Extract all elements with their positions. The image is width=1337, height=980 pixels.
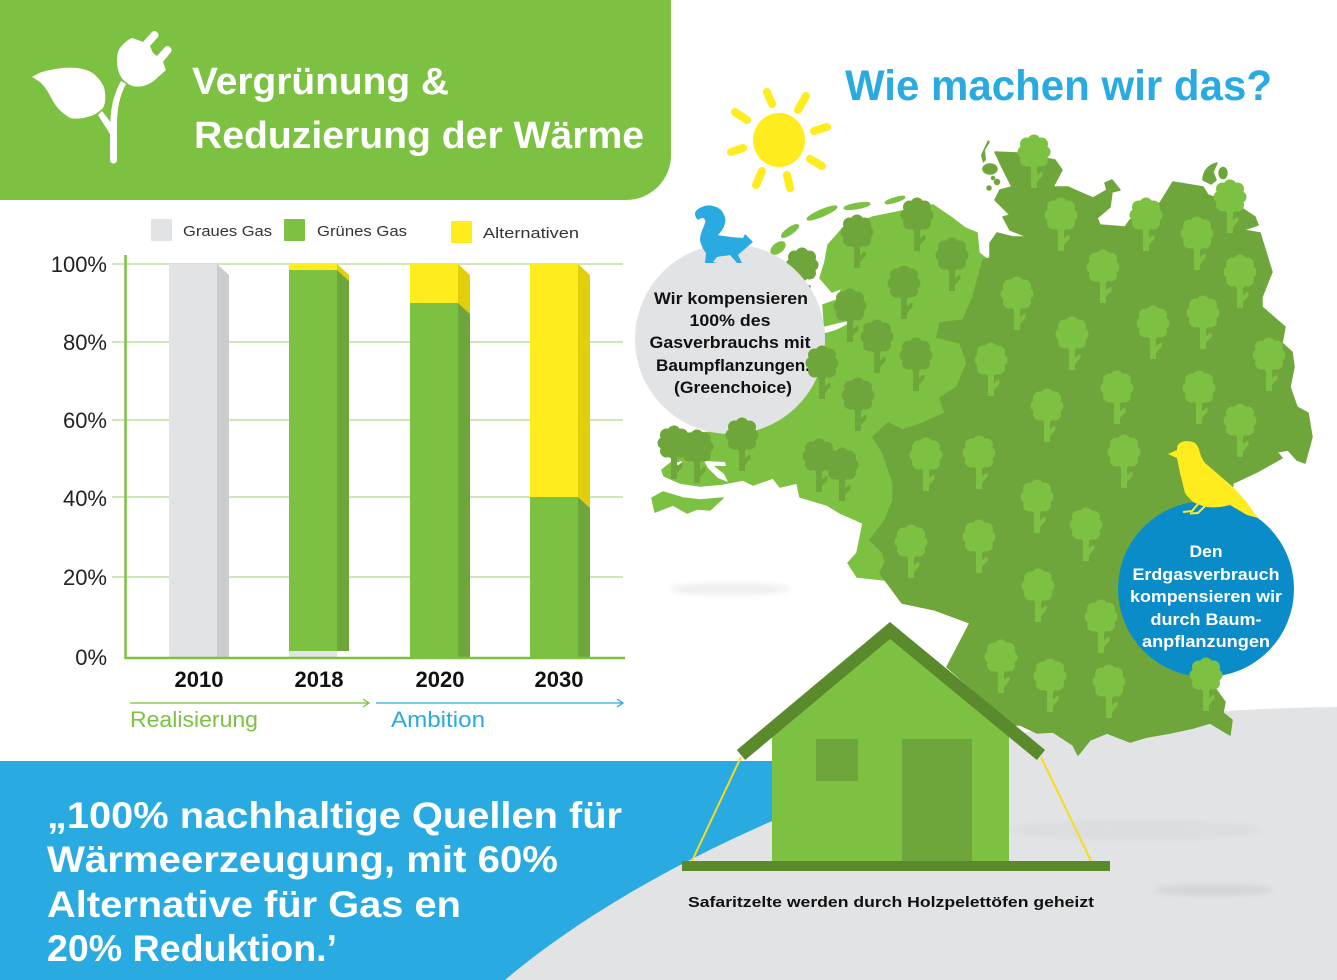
arrow: Ambition: Ambition [391,707,485,732]
caption: Safaritzelte werden durch Holzpelettöfen geheizt [688,894,1094,911]
base [682,861,1110,871]
legend [151,219,579,243]
white inlets [675,320,853,482]
bar 2030 [530,264,590,657]
callout: grey circle: 100% des [690,311,770,330]
arrow: Realisierung: Realisierung [130,707,258,732]
y axis labels: 40% [63,486,107,511]
x axis labels: 2018 [295,667,343,692]
title [192,61,644,157]
x axis labels: 2020 [416,667,464,692]
door [902,739,972,861]
callout: blue circle: Den [1190,542,1222,561]
legend: Grünes Gas [317,223,407,240]
bar 2010 [169,264,229,657]
quote: Alternative für Gas en [47,884,461,925]
callout: grey circle: Wir kompensieren [654,289,808,308]
title: Reduzierung der Wärme [194,115,644,157]
shadows [670,583,1273,896]
trees on Germany [894,134,1286,718]
callout: grey circle: (Greenchoice) [674,378,792,397]
window [816,739,858,781]
grey ground hill [505,707,1337,980]
callout: blue circle: anpflanzungen [1142,632,1270,651]
quote: Wärmeerzeugung, mit 60% [47,839,558,880]
house body [772,632,1009,861]
x axis labels [175,667,583,692]
quote [47,795,622,969]
roof [741,630,1041,755]
callout: blue circle: Erdgasverbrauch [1132,565,1280,584]
trees on western part [658,198,968,501]
map: Germany dark green [870,140,1312,755]
y axis labels: 0% [75,645,107,670]
y axis labels: 100% [51,252,107,277]
quote: „100% nachhaltige Quellen für [47,795,622,836]
safari tent house [682,630,1110,871]
quote: 20% Reduktion.’ [47,928,337,969]
map of Germany and neighbouring region [652,134,1312,755]
icon: yellow bird [1168,441,1258,518]
y axis labels: 20% [63,565,107,590]
icon: squirrel [695,205,753,263]
y axis labels [51,252,107,670]
y axis labels: 60% [63,408,107,433]
trees over grey circle [726,346,838,471]
stacked bar chart [51,252,625,692]
bar 2018 [289,264,349,657]
callout: grey circle: Gasverbrauchs mit [650,333,811,352]
callout: blue circle: durch Baum- [1150,610,1262,629]
title: Vergrünung & [192,61,449,103]
bar 2020 [410,264,470,657]
tree over blue circle [1190,658,1222,711]
x axis labels: 2010 [175,667,223,692]
callout: grey circle: Baumpflanzungen. [656,356,810,375]
callout: blue circle: kompensieren wir [1130,587,1282,606]
y axis labels: 80% [63,330,107,355]
legend: Graues Gas [183,223,272,240]
icon: sun [731,92,827,188]
heading: Wie machen wir das: Wie machen wir das? [845,62,1272,110]
icon: plant with plug [32,31,171,164]
legend: Alternativen [483,225,579,242]
arrow: Realisierung [130,699,369,732]
map: western light green region [652,195,1000,590]
callout: grey circle [635,205,838,471]
callout: blue circle [1118,441,1294,711]
panel: blue quote band [0,761,800,980]
panel: green header [0,0,671,200]
guy ropes [692,757,1091,861]
x axis labels: 2030 [535,667,583,692]
arrow: Ambition [376,699,623,732]
